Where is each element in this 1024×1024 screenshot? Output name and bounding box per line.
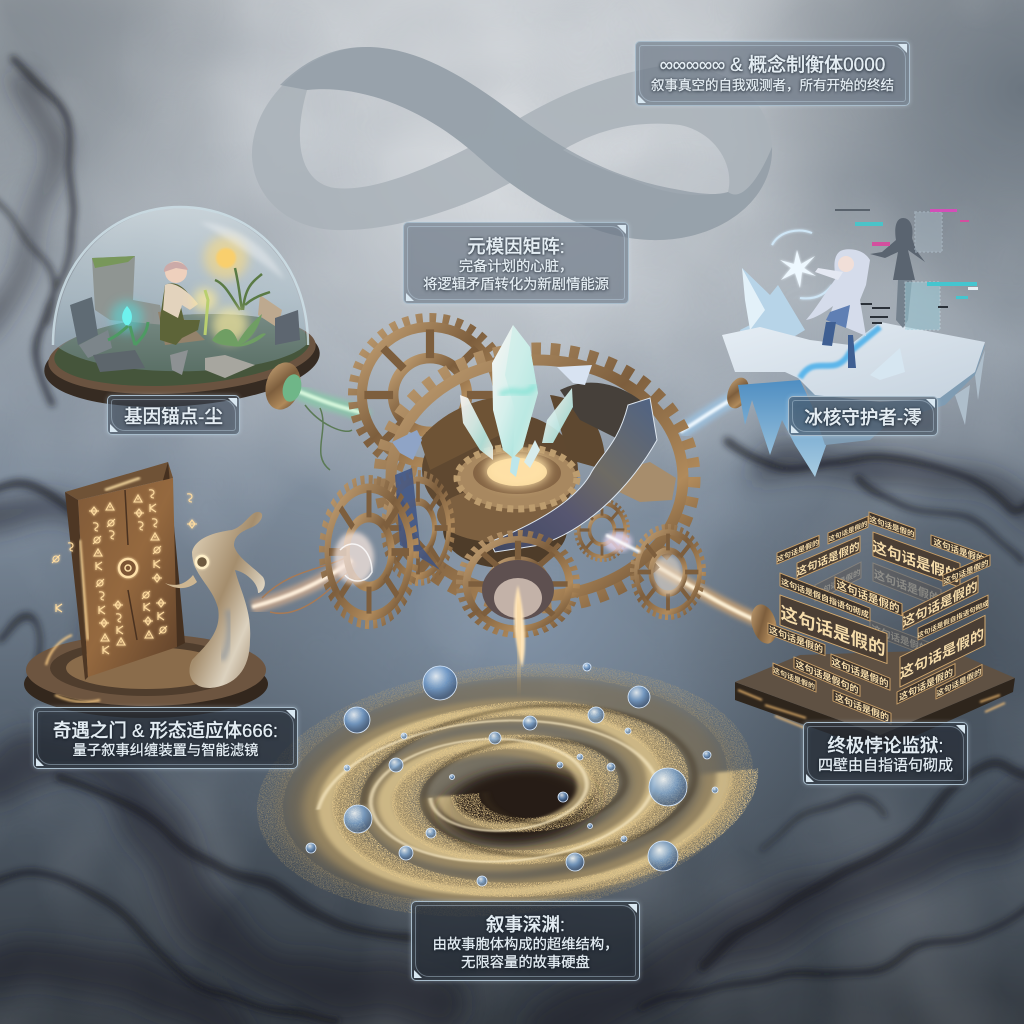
- label: gene anchor dust: [107, 395, 240, 435]
- sentence panels: 这句话是假的: [900, 625, 984, 683]
- sentence panels: 这句话是假的: [899, 666, 953, 704]
- sentence panels: 这句话是假的: [944, 557, 989, 586]
- sentence panels: 这句话是假的: [773, 665, 815, 692]
- plants and glowing flowers: [108, 236, 270, 347]
- ghost back panels: 这句话是假的: [816, 567, 861, 599]
- label: narrative abyss: [411, 901, 640, 981]
- right lower gear: [633, 527, 703, 617]
- label: concept counterweight: [635, 41, 910, 106]
- panel: gene anchor glass dome: [41, 207, 323, 416]
- pedestal disc: [24, 634, 268, 718]
- sentence panels: 这句话是假的: [777, 538, 819, 564]
- iridescent ribbon: [392, 398, 657, 570]
- ice girl: [806, 249, 870, 368]
- label: meta-gene matrix: 将逻辑矛盾转化为新剧情能源: [423, 276, 609, 292]
- label: concept counterweight: ∞∞∞∞∞ & 概念制衡体0000: [660, 55, 885, 76]
- crystal cluster: [460, 325, 592, 477]
- sentence panels: 这句话是假的: [835, 691, 889, 723]
- ghost back panels: [815, 562, 941, 657]
- ice top surface: [722, 322, 985, 402]
- sentence panels: 这句话是假自指语句砌成: [917, 598, 989, 640]
- hologram figure: [835, 209, 978, 330]
- ribbon silhouette: [252, 47, 772, 240]
- panel: paradox prison: [735, 512, 1015, 752]
- right glowing capsule: [604, 532, 682, 595]
- bottom gear: [460, 534, 576, 690]
- label: meta-gene matrix: 元模因矩阵:: [467, 236, 565, 256]
- panel: narrative abyss golden vortex: [258, 648, 756, 932]
- ice magic star: [772, 231, 832, 298]
- connector: orange tube to prison: [650, 562, 781, 646]
- connector: orange tube to door: [252, 558, 352, 613]
- sentence panels: 这句话是假的: [837, 577, 900, 616]
- label: concept counterweight: 叙事真空的自我观测者，所有开始的终结: [651, 78, 894, 93]
- sentence panels: 这句话是假的: [937, 666, 982, 699]
- side gears: [384, 462, 676, 582]
- label: encounter door: 奇遇之门 & 形态适应体666:: [53, 720, 278, 740]
- label: narrative abyss: 叙事深渊:: [486, 914, 565, 934]
- label: narrative abyss: 由故事胞体构成的超维结构，: [433, 936, 618, 952]
- figure kneeling: [160, 261, 200, 345]
- ghost back panels: 这句话是假的: [874, 567, 940, 606]
- label: paradox prison: [803, 722, 968, 785]
- panel: encounter door and morphing adapter: [24, 462, 268, 718]
- ruins: [70, 256, 300, 378]
- central gear with light: [457, 447, 577, 509]
- label: ice core guardian: 冰核守护者-澪: [804, 406, 922, 428]
- label: narrative abyss: 无限容量的故事硬盘: [461, 954, 590, 970]
- label: meta-gene matrix: 完备计划的心脏，: [459, 258, 573, 274]
- sentence panels: 这句话是假的: [903, 578, 977, 630]
- inner machinery body: [420, 383, 640, 568]
- sentence panels: 这句话是假的: [829, 519, 868, 544]
- dome glass front: [53, 207, 308, 345]
- floating story bubbles: [306, 663, 718, 886]
- door spiral seal: [119, 559, 137, 577]
- door monolith: [52, 462, 197, 680]
- vortex spiral: [258, 648, 756, 932]
- sentence panels: 这句话是假的: [832, 655, 889, 690]
- sentence panels: 这句话是假句的: [796, 658, 858, 696]
- infinity ribbon symbol: [252, 47, 772, 240]
- label: paradox prison: 四壁由自指语句砌成: [818, 757, 953, 774]
- panel: central meta-gene matrix: [322, 319, 703, 690]
- label: encounter door: 量子叙事纠缠装置与智能滤镜: [73, 742, 258, 758]
- front strand: [280, 47, 772, 240]
- sentence panels: 这句话是假的: [873, 537, 960, 586]
- sentence panels: 这句话是假的: [781, 602, 885, 660]
- label: gene anchor dust: 基因锚点-尘: [124, 406, 223, 426]
- label: meta-gene matrix: [403, 222, 629, 304]
- ice spires: [740, 268, 805, 345]
- dome interior back: [55, 208, 306, 371]
- panel: ice guardian floating island: [722, 209, 985, 477]
- back-left big gear: [354, 319, 506, 471]
- sentence panels: 这句话是假的: [769, 624, 823, 655]
- tube fitting: [260, 358, 306, 414]
- left lower gear: [322, 480, 416, 624]
- sentence panels: 这句话是假的: [870, 513, 915, 539]
- large ring gear: [381, 350, 693, 606]
- ghost back panels: 这句话是假的: [872, 622, 929, 656]
- left glowing capsule: [334, 532, 374, 584]
- sentence panels: 这句话是假的: [934, 536, 985, 565]
- sentence panels: 这句话是假的: [797, 539, 860, 579]
- liquid morphing adapter: [165, 512, 265, 688]
- prison platform: [735, 650, 1015, 752]
- sentence panels: [768, 512, 990, 724]
- label: encounter door: [33, 707, 298, 769]
- dome base: [41, 306, 323, 416]
- label: ice core guardian: [788, 396, 938, 436]
- connector: blue tube to ice: [680, 375, 753, 432]
- ice underside spikes: [738, 345, 985, 477]
- connector: green tube from dome: [295, 390, 368, 470]
- door runes: [52, 490, 197, 654]
- sentence panels: 这句话是假自指语句砌成: [781, 576, 870, 620]
- glowing crack: [800, 327, 880, 378]
- label: paradox prison: 终极悖论监狱:: [827, 735, 944, 756]
